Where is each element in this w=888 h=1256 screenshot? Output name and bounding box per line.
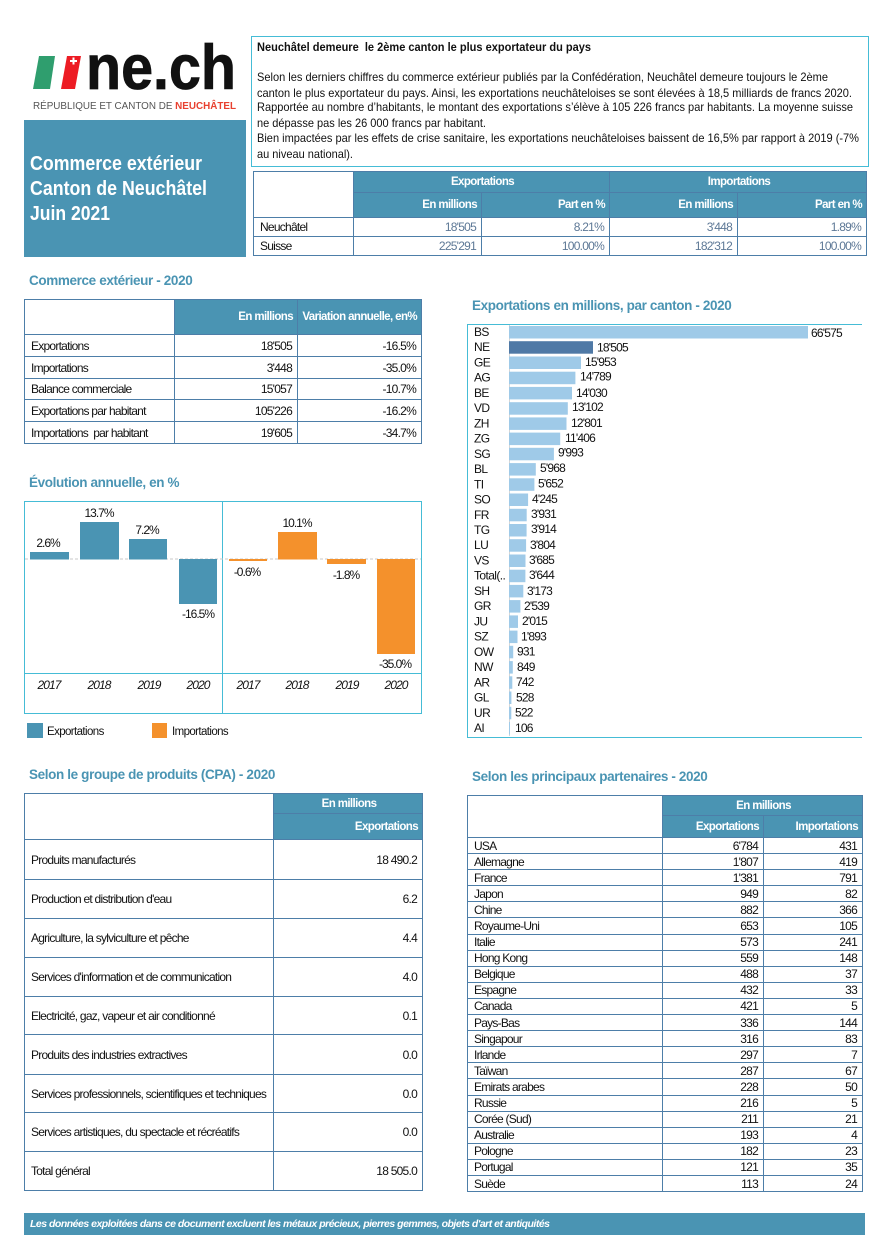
- logo: ne.ch: [33, 33, 237, 112]
- table: principaux partenaires: 287: [740, 1064, 758, 1078]
- value labels: 106: [515, 721, 534, 735]
- year labels: 2017: [235, 678, 262, 692]
- title: Juin 2021: [30, 203, 110, 225]
- table: groupe de produits: Exportations: [355, 820, 418, 832]
- table: principaux partenaires: Royaume-Uni: [474, 919, 539, 933]
- table: groupe de produits: 4.4: [403, 931, 417, 945]
- table: Neuchâtel vs Suisse: 8.21%: [574, 220, 604, 234]
- heading: principaux partenaires: Selon les principaux partenaires - 2020: [472, 769, 707, 784]
- canton labels: [474, 325, 505, 735]
- table: groupe de produits: 0.0: [403, 1125, 417, 1139]
- footer note: Les données exploitées dans ce document excluent les métaux précieux, pierres gemmes, objets d'art et antiquités: [30, 1218, 550, 1230]
- value labels: 2.6%: [36, 536, 61, 550]
- value labels: 931: [517, 644, 536, 658]
- legend: Importations: [172, 726, 229, 738]
- heading: évolution annuelle: Évolution annuelle, en %: [29, 475, 179, 490]
- canton labels: NE: [474, 340, 490, 354]
- footer note: [24, 1213, 865, 1235]
- table: groupe de produits: Production et distribution d'eau: [31, 892, 171, 906]
- year labels: 2018: [86, 678, 112, 692]
- table: principaux partenaires: Taïwan: [474, 1064, 508, 1078]
- table: principaux partenaires: 211: [741, 1112, 758, 1126]
- bars: importations: [229, 532, 415, 654]
- canton labels: GR: [474, 599, 492, 613]
- value labels: -16.5%: [182, 607, 215, 621]
- canton labels: BL: [474, 462, 488, 476]
- canton labels: BS: [474, 325, 489, 339]
- table: groupe de produits: 18 490.2: [376, 852, 417, 866]
- table: principaux partenaires: 882: [740, 903, 758, 917]
- year labels: 2017: [36, 678, 63, 692]
- table: groupe de produits: 0.1: [403, 1008, 417, 1022]
- value labels: 3'804: [530, 538, 556, 552]
- value labels: 66'575: [811, 326, 843, 340]
- value labels: 522: [515, 706, 534, 720]
- intro paragraph: au niveau national).: [257, 147, 353, 161]
- canton labels: SO: [474, 492, 490, 506]
- icon: green stripe: [33, 56, 55, 89]
- table: groupe de produits: Services d'information et de communication: [31, 970, 231, 984]
- table: principaux partenaires: 33: [845, 983, 857, 997]
- table: groupe de produits: Services artistiques, du spectacle et récréatifs: [31, 1125, 239, 1139]
- value labels: 10.1%: [282, 516, 313, 530]
- table: principaux partenaires: 6'784: [733, 839, 758, 853]
- table: Neuchâtel vs Suisse: En millions: [678, 199, 733, 211]
- table: commerce extérieur: Importations: [31, 360, 88, 374]
- table: groupe de produits: 6.2: [403, 892, 417, 906]
- table: principaux partenaires: Hong Kong: [474, 951, 527, 965]
- table: Neuchâtel vs Suisse: [253, 171, 867, 256]
- table: commerce extérieur: -35.0%: [382, 360, 416, 374]
- table: commerce extérieur: -34.7%: [382, 426, 416, 440]
- table: principaux partenaires: 193: [740, 1128, 758, 1142]
- table: principaux partenaires: 421: [740, 999, 758, 1013]
- table: commerce extérieur: Exportations par habitant: [31, 404, 146, 418]
- table: principaux partenaires: 83: [845, 1032, 857, 1046]
- table: principaux partenaires: Emirats arabes: [474, 1080, 544, 1094]
- value labels: 2'015: [522, 614, 548, 628]
- table: principaux partenaires: Portugal: [474, 1160, 513, 1174]
- table: principaux partenaires: Canada: [474, 999, 512, 1013]
- table: Neuchâtel vs Suisse: 1.89%: [831, 220, 861, 234]
- table: principaux partenaires: 432: [740, 983, 758, 997]
- table: commerce extérieur: Variation annuelle, en%: [302, 311, 417, 323]
- table: principaux partenaires: 5: [851, 1096, 857, 1110]
- table: commerce extérieur: En millions: [238, 311, 293, 323]
- canton labels: UR: [474, 706, 491, 720]
- table: Neuchâtel vs Suisse: En millions: [422, 199, 477, 211]
- table: principaux partenaires: 105: [839, 919, 857, 933]
- table: Neuchâtel vs Suisse: Part en %: [815, 199, 862, 211]
- table: principaux partenaires: 23: [845, 1144, 857, 1158]
- table: groupe de produits: Produits des industries extractives: [31, 1048, 187, 1062]
- intro paragraph: ne dépasse pas les 26 000 francs par habitant.: [257, 116, 486, 130]
- canton labels: ZH: [474, 416, 489, 430]
- year labels: 2019: [136, 678, 162, 692]
- table: principaux partenaires: Belgique: [474, 967, 515, 981]
- value labels: 2'539: [524, 599, 550, 613]
- value labels: 3'644: [529, 568, 555, 582]
- table: principaux partenaires: 216: [740, 1096, 758, 1110]
- value labels: 18'505: [597, 340, 629, 354]
- year labels: 2018: [284, 678, 310, 692]
- chart: évolution annuelle: [24, 501, 422, 714]
- canton labels: BE: [474, 386, 489, 400]
- table: principaux partenaires: 653: [740, 919, 758, 933]
- table: Neuchâtel vs Suisse: Neuchâtel: [260, 220, 307, 234]
- table: principaux partenaires: Italie: [474, 935, 495, 949]
- table: principaux partenaires: 228: [740, 1080, 758, 1094]
- table: commerce extérieur: 18'505: [261, 338, 292, 352]
- table: commerce extérieur: Importations par habitant: [31, 426, 148, 440]
- value labels: 14'030: [576, 386, 608, 400]
- table: commerce extérieur: -16.2%: [382, 404, 416, 418]
- canton labels: GL: [474, 690, 490, 704]
- table: principaux partenaires: 182: [740, 1144, 758, 1158]
- table: Neuchâtel vs Suisse: 225'291: [439, 239, 476, 253]
- value labels: 1'893: [521, 630, 547, 644]
- table: Neuchâtel vs Suisse: Importations: [708, 176, 770, 188]
- table: groupe de produits: En millions: [322, 798, 376, 810]
- table: principaux partenaires: 113: [741, 1177, 758, 1191]
- intro paragraph: Rapportée au nombre d’habitants, le montant des exportations s’élève à 105 226 francs par habitants. La moyenne suisse: [257, 100, 853, 114]
- canton labels: NW: [474, 660, 494, 674]
- canton labels: SG: [474, 447, 490, 461]
- logo subtitle: RÉPUBLIQUE ET CANTON DE NEUCHÂTEL: [33, 99, 237, 112]
- table: principaux partenaires: 791: [839, 871, 857, 885]
- value labels: 742: [516, 675, 535, 689]
- value labels: 3'914: [531, 522, 557, 536]
- table: principaux partenaires: Japon: [474, 887, 503, 901]
- value labels: 4'245: [532, 492, 558, 506]
- table: groupe de produits: 0.0: [403, 1086, 417, 1100]
- heading: commerce extérieur: Commerce extérieur - 2020: [29, 273, 192, 288]
- value labels: 7.2%: [135, 523, 160, 537]
- title: [30, 153, 207, 225]
- value labels: 11'406: [565, 431, 596, 445]
- intro paragraph: Selon les derniers chiffres du commerce extérieur publiés par la Confédération, Neuchâtel demeure toujours le 2ème: [257, 70, 828, 84]
- year labels: 2020: [185, 678, 211, 692]
- bars: [509, 326, 808, 734]
- table: principaux partenaires: Importations: [796, 820, 858, 832]
- value labels: 3'173: [527, 584, 553, 598]
- table: groupe de produits: Agriculture, la sylviculture et pêche: [31, 931, 189, 945]
- icon: red stripe with swiss cross: [61, 56, 81, 89]
- canton labels: GE: [474, 356, 491, 370]
- table: commerce extérieur: 3'448: [267, 360, 292, 374]
- table: principaux partenaires: 21: [845, 1112, 857, 1126]
- canton labels: FR: [474, 508, 490, 522]
- table: principaux partenaires: 35: [845, 1160, 857, 1174]
- value labels: -1.8%: [333, 568, 360, 582]
- canton labels: JU: [474, 614, 487, 628]
- table: principaux partenaires: 1'381: [733, 871, 758, 885]
- table: principaux partenaires: Russie: [474, 1096, 506, 1110]
- table: principaux partenaires: Exportations: [696, 820, 759, 832]
- table: principaux partenaires: Corée (Sud): [474, 1112, 531, 1126]
- table: groupe de produits: Produits manufacturés: [31, 852, 135, 866]
- table: groupe de produits: Services professionnels, scientifiques et techniques: [31, 1086, 266, 1100]
- canton labels: AR: [474, 675, 490, 689]
- table: principaux partenaires: 366: [839, 903, 857, 917]
- canton labels: VS: [474, 554, 489, 568]
- table: principaux partenaires: 419: [839, 855, 857, 869]
- canton labels: SZ: [474, 630, 488, 644]
- table: principaux partenaires: 82: [845, 887, 857, 901]
- table: principaux partenaires: 67: [845, 1064, 857, 1078]
- heading: groupe de produits: Selon le groupe de produits (CPA) - 2020: [29, 767, 275, 782]
- table: principaux partenaires: Pologne: [474, 1144, 513, 1158]
- table: principaux partenaires: 4: [851, 1128, 857, 1142]
- table: principaux partenaires: Espagne: [474, 983, 516, 997]
- table: principaux partenaires: 297: [740, 1048, 758, 1062]
- table: principaux partenaires: 316: [740, 1032, 758, 1046]
- table: groupe de produits: Electricité, gaz, vapeur et air conditionné: [31, 1008, 215, 1022]
- value labels: [515, 326, 843, 735]
- table: principaux partenaires: Suède: [474, 1177, 505, 1191]
- table: Neuchâtel vs Suisse: Part en %: [558, 199, 605, 211]
- table: commerce extérieur: 15'057: [261, 382, 292, 396]
- canton labels: OW: [474, 645, 495, 659]
- value labels: -0.6%: [234, 565, 261, 579]
- table: groupe de produits: 0.0: [403, 1048, 417, 1062]
- title panel: [24, 120, 246, 257]
- canton labels: AG: [474, 371, 490, 385]
- value labels: 15'953: [585, 355, 617, 369]
- intro paragraph: canton le plus exportateur du pays. Ainsi, les exportations neuchâteloises se sont élevées à 18,5 milliards de francs 2020.: [257, 86, 852, 100]
- panel: intro text: [251, 36, 869, 167]
- bars: exportations: [30, 522, 217, 604]
- table: Neuchâtel vs Suisse: 3'448: [707, 220, 732, 234]
- logo wordmark: ne.ch: [86, 33, 236, 103]
- canton labels: TG: [474, 523, 490, 537]
- table: principaux partenaires: Australie: [474, 1128, 514, 1142]
- value labels: 13.7%: [84, 506, 115, 520]
- table: principaux partenaires: 949: [740, 887, 758, 901]
- table: principaux partenaires: 488: [740, 967, 758, 981]
- table: groupe de produits: 18 505.0: [376, 1164, 417, 1178]
- value labels: 9'993: [558, 446, 584, 460]
- year labels: 2019: [334, 678, 360, 692]
- table: principaux partenaires: 241: [839, 935, 857, 949]
- table: commerce extérieur: Exportations: [31, 338, 89, 352]
- value labels: 12'801: [571, 416, 603, 430]
- table: principaux partenaires: 559: [740, 951, 758, 965]
- table: principaux partenaires: Singapour: [474, 1032, 522, 1046]
- title: Canton de Neuchâtel: [30, 178, 207, 200]
- table: Neuchâtel vs Suisse: 182'312: [695, 239, 732, 253]
- canton labels: LU: [474, 538, 488, 552]
- table: principaux partenaires: 5: [851, 999, 857, 1013]
- year labels: [36, 678, 409, 692]
- table: principaux partenaires: 573: [740, 935, 758, 949]
- table: commerce extérieur: 19'605: [261, 426, 292, 440]
- canton labels: VD: [474, 401, 490, 415]
- table: groupe de produits: [24, 793, 423, 1191]
- value labels: 5'968: [540, 461, 566, 475]
- legend: Exportations: [47, 726, 105, 738]
- table: principaux partenaires: 336: [740, 1016, 758, 1030]
- table: Neuchâtel vs Suisse: 100.00%: [562, 239, 604, 253]
- legend: [27, 723, 229, 738]
- table: groupe de produits: 4.0: [403, 970, 417, 984]
- value labels: 3'931: [531, 507, 557, 521]
- value labels: 849: [517, 660, 536, 674]
- table: principaux partenaires: France: [474, 871, 507, 885]
- table: principaux partenaires: Allemagne: [474, 855, 524, 869]
- value labels: 528: [516, 690, 535, 704]
- title: Commerce extérieur: [30, 153, 202, 175]
- table: commerce extérieur: -16.5%: [382, 338, 416, 352]
- canton labels: SH: [474, 584, 489, 598]
- table: principaux partenaires: [467, 795, 863, 1192]
- chart: exportations par canton: [467, 324, 862, 738]
- table: commerce extérieur: [24, 299, 422, 444]
- canton labels: AI: [474, 721, 484, 735]
- heading: exportations par canton: Exportations en millions, par canton - 2020: [472, 298, 731, 313]
- intro paragraph: [257, 70, 859, 161]
- table: principaux partenaires: 144: [839, 1016, 857, 1030]
- value labels: 3'685: [529, 553, 555, 567]
- table: commerce extérieur: 105'226: [255, 404, 292, 418]
- table: groupe de produits: Total général: [31, 1164, 90, 1178]
- table: principaux partenaires: 50: [845, 1080, 857, 1094]
- table: principaux partenaires: 7: [851, 1048, 857, 1062]
- year labels: 2020: [383, 678, 409, 692]
- table: principaux partenaires: Irlande: [474, 1048, 505, 1062]
- value labels: 13'102: [572, 400, 604, 414]
- table: Neuchâtel vs Suisse: Exportations: [451, 176, 514, 188]
- canton labels: Total(..: [474, 569, 505, 583]
- table: principaux partenaires: 1'807: [733, 855, 758, 869]
- table: principaux partenaires: 121: [740, 1160, 758, 1174]
- intro heading: Neuchâtel demeure le 2ème canton le plus exportateur du pays: [257, 40, 591, 54]
- table: Neuchâtel vs Suisse: Suisse: [260, 239, 292, 253]
- table: principaux partenaires: USA: [474, 839, 496, 853]
- canton labels: TI: [474, 477, 484, 491]
- table: principaux partenaires: Pays-Bas: [474, 1016, 519, 1030]
- table: principaux partenaires: 431: [839, 839, 857, 853]
- value labels: [36, 506, 412, 671]
- value labels: -35.0%: [379, 657, 412, 671]
- table: principaux partenaires: En millions: [736, 800, 791, 812]
- table: Neuchâtel vs Suisse: 18'505: [445, 220, 476, 234]
- table: principaux partenaires: 148: [839, 951, 857, 965]
- table: commerce extérieur: Balance commerciale: [31, 382, 131, 396]
- table: principaux partenaires: 24: [845, 1177, 857, 1191]
- table: Neuchâtel vs Suisse: 100.00%: [819, 239, 861, 253]
- canton labels: ZG: [474, 432, 490, 446]
- table: principaux partenaires: Chine: [474, 903, 502, 917]
- table: principaux partenaires: 37: [845, 967, 857, 981]
- value labels: 14'789: [580, 370, 612, 384]
- value labels: 5'652: [538, 476, 564, 490]
- table: commerce extérieur: -10.7%: [382, 382, 416, 396]
